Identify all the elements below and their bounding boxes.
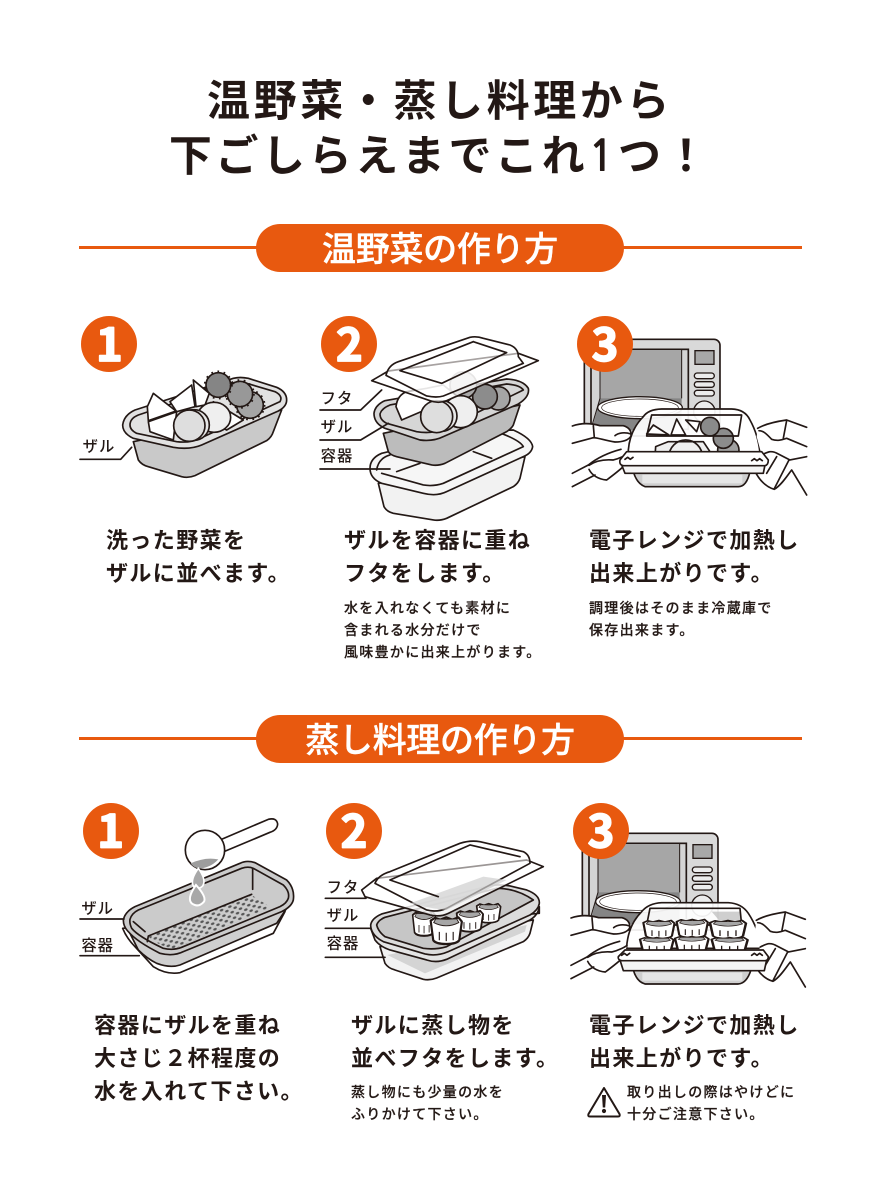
note: steamed step 2: 蒸し物にも少量の水を — [351, 1084, 504, 1100]
note: steamed step 2 — [351, 1084, 504, 1122]
step 2 number: steamed: 2 — [341, 795, 367, 861]
text: steamed step 3: 出来上がりです。 — [589, 1046, 774, 1071]
text: warm vegetables step 2: フタをします。 — [344, 561, 506, 586]
note: warm vegetables step 2: 風味豊かに出来上がります。 — [344, 644, 542, 660]
section rule: warm vegetables — [79, 246, 802, 249]
text: steamed step 1: 水を入れて下さい。 — [94, 1079, 304, 1104]
section heading: steamed dishes: 蒸し料理の作り方 — [305, 722, 575, 760]
note: warm vegetables step 3 — [589, 600, 773, 638]
step 3 number: steamed: 3 — [588, 795, 614, 861]
text: steamed step 1 — [94, 1013, 304, 1104]
illustration: colander with vegetables — [80, 372, 287, 477]
text: warm vegetables step 1: ザルに並べます。 — [106, 561, 291, 586]
text: warm vegetables step 1 — [106, 528, 291, 586]
text: steamed step 2: 並べフタをします。 — [351, 1046, 559, 1071]
title: 下ごしらえまでこれ1つ！ — [169, 133, 711, 181]
illustration: water poured into colander with spoon — [80, 819, 294, 973]
text: steamed step 1: 容器にザルを重ね — [94, 1013, 281, 1038]
text: steamed step 3 — [589, 1013, 800, 1071]
step 1 number: vegetables: 1 — [96, 309, 123, 375]
step 1 number: vegetables — [81, 309, 137, 375]
illustration: stacked lid, dumplings, container: ザル — [327, 907, 359, 924]
note: warm vegetables step 2: 水を入れなくても素材に — [344, 600, 511, 616]
illustration: water poured into colander with spoon: ザル — [81, 900, 114, 917]
section heading: warm vegetables — [256, 224, 624, 272]
text: warm vegetables step 3: 電子レンジで加熱し — [589, 528, 800, 553]
text: steamed step 3: 電子レンジで加熱し — [589, 1013, 800, 1038]
illustration: microwave with container, dumplings — [571, 833, 805, 987]
illustration: stacked lid, colander, container: ザル — [321, 419, 353, 436]
illustration: colander with vegetables: ザル — [83, 438, 115, 455]
illustration: stacked lid, dumplings, container: フタ — [327, 879, 359, 896]
note: warm vegetables step 3: 調理後はそのまま冷蔵庫で — [589, 600, 773, 616]
step 3 number: vegetables: 3 — [592, 309, 618, 375]
text: warm vegetables step 3: 出来上がりです。 — [589, 561, 774, 586]
step 3 number: vegetables — [577, 309, 633, 375]
illustration: microwave with container, vegetables — [572, 339, 807, 495]
section rule: steamed dishes — [79, 737, 802, 740]
note: warm vegetables step 2: 含まれる水分だけで — [344, 622, 482, 638]
note: steamed step 2: ふりかけて下さい。 — [351, 1106, 489, 1122]
text: warm vegetables step 2 — [344, 528, 531, 586]
illustration: water poured into colander with spoon: 容器 — [81, 938, 114, 955]
text: steamed step 2: ザルに蒸し物を — [351, 1013, 515, 1038]
text: warm vegetables step 1: 洗った野菜を — [106, 528, 246, 553]
icon: warning triangle — [588, 1088, 620, 1116]
illustration: stacked lid, colander, container — [320, 337, 538, 520]
note: steamed step 3 warning: 取り出しの際はやけどに — [627, 1084, 795, 1100]
step 1 number: steamed — [83, 795, 139, 861]
step 2 number: steamed — [326, 795, 382, 861]
step 1 number: steamed: 1 — [97, 795, 124, 861]
illustration: stacked lid, dumplings, container: 容器 — [327, 936, 359, 953]
illustration: stacked lid, colander, container: 容器 — [321, 448, 353, 465]
note: steamed step 3 warning: 十分ご注意下さい。 — [627, 1106, 765, 1122]
text: steamed step 2 — [351, 1013, 559, 1071]
title — [169, 78, 711, 181]
text: warm vegetables step 3 — [589, 528, 800, 586]
note: warm vegetables step 3: 保存出来ます。 — [589, 622, 695, 638]
section heading: warm vegetables: 温野菜の作り方 — [322, 231, 558, 269]
text: steamed step 1: 大さじ２杯程度の — [94, 1046, 281, 1071]
note: steamed step 3 warning — [627, 1084, 795, 1122]
illustration: stacked lid, dumplings, container — [325, 841, 543, 980]
illustration: stacked lid, colander, container: フタ — [321, 391, 353, 408]
title: 温野菜・蒸し料理から — [207, 78, 673, 126]
section heading: steamed dishes — [256, 715, 624, 763]
step 3 number: steamed — [573, 795, 629, 861]
step 2 number: vegetables — [321, 309, 377, 375]
note: warm vegetables step 2 — [344, 600, 542, 660]
step 2 number: vegetables: 2 — [336, 309, 363, 375]
text: warm vegetables step 2: ザルを容器に重ね — [344, 528, 531, 553]
